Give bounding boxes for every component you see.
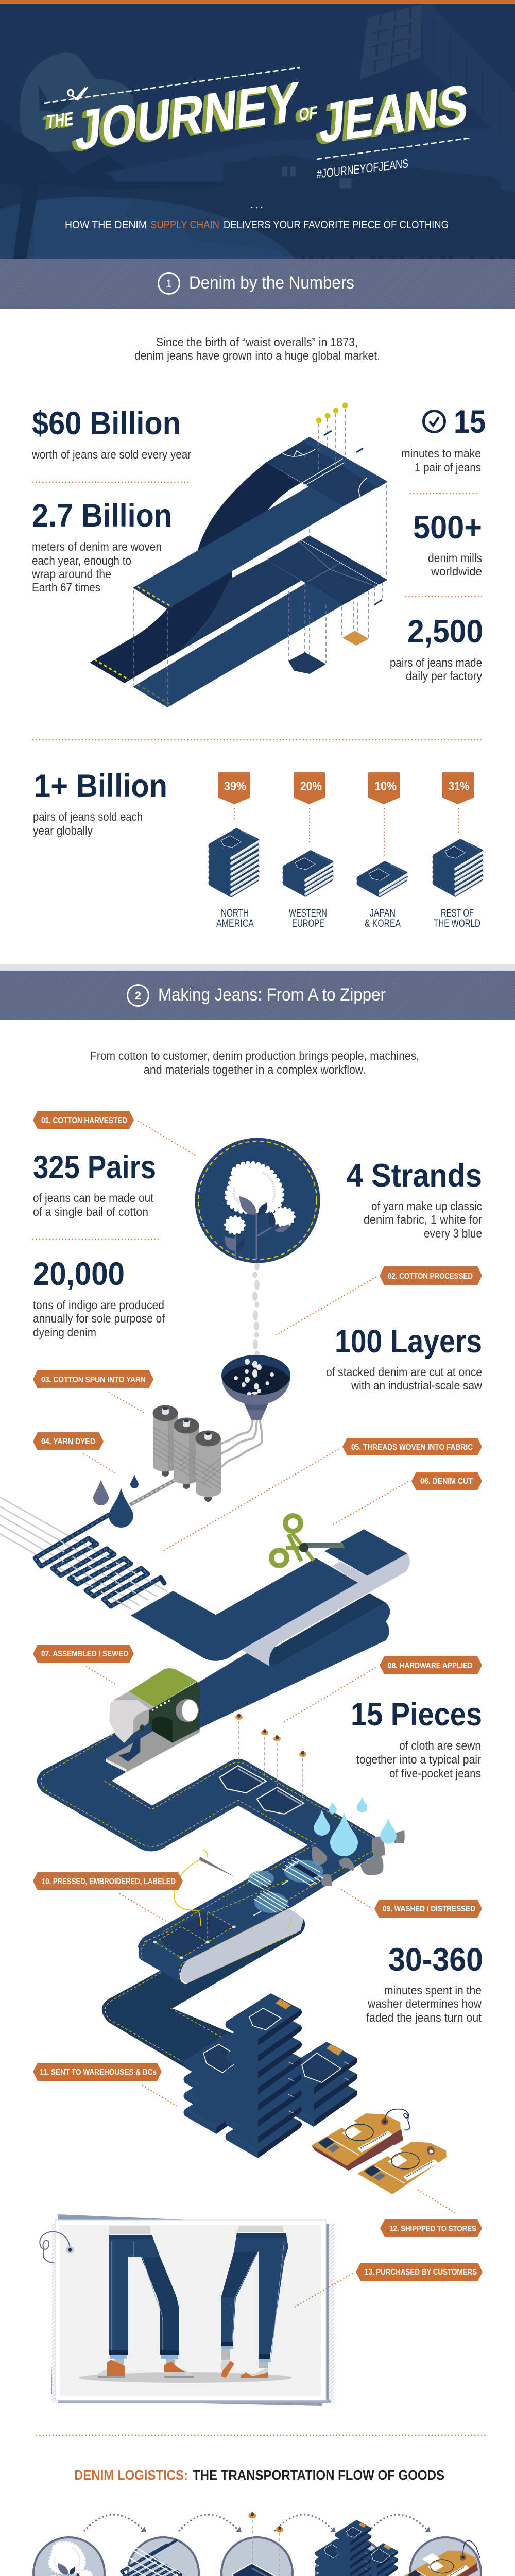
icon: three spools — [152, 1405, 221, 1502]
tag 09 — [374, 1900, 482, 1918]
node: fabric — [122, 2537, 202, 2576]
icon: needle and thread — [174, 1850, 235, 1926]
title: JEANS — [318, 73, 471, 155]
stat: 1+ billion — [33, 768, 167, 837]
hero background silhouettes — [0, 4, 515, 259]
region: western europe: 20% — [300, 779, 322, 793]
stat: 500+: worldwide — [431, 565, 482, 578]
region: rest of the world: REST OF — [441, 907, 474, 919]
chart: regional share of jeans sold — [208, 772, 484, 929]
stat: 325 pairs: of a single bail of cotton — [33, 1205, 148, 1218]
tag 06 — [411, 1472, 482, 1490]
tag 06: 06. DENIM CUT — [420, 1477, 473, 1486]
region: north america: NORTH — [221, 907, 249, 919]
stat: 500+: denim mills — [428, 551, 482, 565]
icon: dye drops — [93, 1475, 139, 1505]
icon: sewing machine — [106, 1668, 200, 1772]
region: north america — [208, 772, 260, 929]
stat: 60 billion: $60 Billion — [32, 405, 181, 442]
stat: 30-360 — [366, 1942, 483, 2024]
stat: 4 strands: 4 Strands — [347, 1158, 482, 1194]
right figure — [221, 2226, 288, 2378]
stat: 1+ billion: year globally — [33, 824, 93, 837]
arrows — [84, 2515, 431, 2532]
stat: 100 layers: of stacked denim are cut at once — [326, 1365, 482, 1379]
section heading 1: Denim by the Numbers — [189, 273, 354, 293]
tag 10: 10. PRESSED, EMBROIDERED, LABELED — [42, 1877, 176, 1886]
tag 02 — [380, 1266, 482, 1285]
tag 05: 05. THREADS WOVEN INTO FABRIC — [351, 1443, 473, 1452]
region: north america: 39% — [224, 779, 246, 793]
tag 03: 03. COTTON SPUN INTO YARN — [41, 1376, 146, 1384]
stat: 60 billion: worth of jeans are sold every year — [31, 448, 191, 461]
illustration: denim fabric path — [37, 1529, 410, 2073]
tag 04 — [33, 1432, 104, 1450]
region: rest of the world: THE WORLD — [434, 918, 480, 929]
icon: stacks of jeans — [183, 1993, 357, 2158]
hero banner — [0, 0, 515, 259]
stat: 15 pieces: of five-pocket jeans — [389, 1767, 481, 1780]
stat: 2,500 — [390, 614, 483, 683]
intro text 1: Since the birth of “waist overalls” in 1873, — [156, 335, 358, 349]
stat: 2,500: pairs of jeans made — [390, 656, 482, 669]
stat: 2.7 billion: each year, enough to — [32, 554, 131, 567]
tag 08: 08. HARDWARE APPLIED — [388, 1662, 473, 1670]
node: retail — [402, 2537, 481, 2576]
region: japan and korea: 10% — [374, 779, 397, 793]
tag 13 — [356, 2263, 483, 2281]
stat: 325 pairs: of jeans can be made out — [33, 1191, 154, 1205]
section heading 2: 2 — [135, 989, 141, 1002]
stat: 20,000 — [33, 1256, 165, 1339]
section heading 2 — [0, 964, 515, 1020]
stat: 60 billion — [31, 405, 191, 461]
stat: 100 layers: 100 Layers — [335, 1324, 482, 1360]
icon: stones and distressing — [248, 1830, 405, 1916]
stat: 2,500: 2,500 — [407, 614, 483, 650]
tag 07: 07. ASSEMBLED / SEWED — [41, 1650, 128, 1658]
tag 11 — [33, 2063, 162, 2081]
tag 08 — [380, 1656, 482, 1674]
stat: 500+: 500+ — [413, 510, 482, 546]
region: rest of the world: 31% — [449, 779, 469, 793]
subtitle: DELIVERS YOUR FAVORITE PIECE OF CLOTHING — [224, 219, 449, 231]
title: JOURNEY — [74, 70, 301, 162]
stat: 1+ billion: pairs of jeans sold each — [33, 810, 143, 823]
node: manufacturing — [221, 2512, 293, 2576]
icon: funnel — [221, 1355, 290, 1420]
cotton badge — [195, 1138, 320, 1263]
stat: 500+ — [413, 510, 482, 578]
logistics heading — [74, 2467, 444, 2483]
stat: 4 strands: of yarn make up classic — [371, 1199, 482, 1213]
title — [46, 70, 471, 162]
region: japan and korea: & KOREA — [365, 918, 401, 929]
intro text 2: From cotton to customer, denim production brings people, machines, — [90, 1049, 419, 1062]
stat: 30-360: 30-360 — [388, 1942, 483, 1978]
region: western europe: WESTERN — [289, 907, 327, 919]
icon: large dye drop — [109, 1488, 133, 1528]
tag 04: 04. YARN DYED — [41, 1437, 95, 1446]
icon: falling cotton fibers — [252, 1262, 260, 1360]
dots — [252, 207, 263, 208]
subtitle: HOW THE DENIM — [65, 219, 147, 231]
stat: 100 layers — [326, 1324, 482, 1392]
stat: 1+ billion: 1+ Billion — [34, 768, 167, 804]
title: OF — [299, 103, 318, 125]
upper stitched line — [44, 67, 300, 103]
logistics flow — [33, 2512, 481, 2576]
intro text 1 — [134, 335, 380, 362]
tag 05 — [342, 1438, 482, 1455]
region: rest of the world — [433, 772, 484, 929]
tag 07 — [33, 1645, 134, 1663]
subtitle: SUPPLY CHAIN — [150, 219, 219, 231]
tag 13: 13. PURCHASED BY CUSTOMERS — [365, 2268, 477, 2277]
photo card: customers wearing jeans — [40, 2214, 334, 2406]
stat: 100 layers: with an industrial-scale saw — [351, 1379, 482, 1392]
logistics heading: THE TRANSPORTATION FLOW OF GOODS — [193, 2467, 444, 2483]
lower stitched line — [317, 138, 470, 159]
tag 12 — [380, 2219, 482, 2237]
tag 02: 02. COTTON PROCESSED — [388, 1272, 473, 1281]
node: cotton — [33, 2537, 105, 2576]
intro text 1: denim jeans have grown into a huge global market. — [134, 349, 380, 362]
string and hole — [40, 2232, 74, 2263]
stat: 30-360: washer determines how — [367, 1997, 482, 2010]
stat: 20,000: annually for sole purpose of — [33, 1312, 165, 1325]
subtitle — [65, 219, 449, 231]
stat: 2.7 billion: Earth 67 times — [32, 581, 100, 594]
title: THE — [46, 108, 74, 132]
stat: 2.7 billion: wrap around the — [31, 567, 111, 581]
node: storage — [315, 2520, 398, 2576]
tag 12: 12. SHIPPPED TO STORES — [389, 2225, 476, 2233]
stat: 4 strands — [347, 1158, 482, 1240]
region: western europe: EUROPE — [292, 918, 324, 929]
stat: 15 minutes: 1 pair of jeans — [415, 461, 481, 474]
stat: 4 strands: denim fabric, 1 white for — [364, 1213, 482, 1226]
tag 10 — [33, 1872, 183, 1890]
icon: rivets and pockets — [219, 1714, 306, 1814]
left figure — [98, 2226, 194, 2378]
illustration: two pairs of jeans — [90, 403, 388, 707]
stat: 15 pieces: together into a typical pair — [356, 1753, 481, 1766]
tag 03 — [33, 1370, 153, 1388]
stat: 325 pairs — [33, 1149, 156, 1218]
intro text 2 — [90, 1049, 419, 1076]
stat: 20,000: 20,000 — [33, 1256, 125, 1292]
stat: 15 minutes: minutes to make — [401, 447, 481, 460]
pocket piece — [288, 652, 326, 674]
icon: price tags — [312, 2109, 447, 2194]
hashtag: #JOURNEYOFJEANS — [317, 157, 408, 181]
icon: water drops — [314, 1797, 397, 1856]
region: japan and korea: JAPAN — [370, 907, 396, 919]
stat: 30-360: faded the jeans turn out — [366, 2011, 482, 2024]
region: north america: AMERICA — [216, 918, 254, 929]
intro text 2: and materials together in a complex workflow. — [144, 1063, 366, 1076]
tag 11: 11. SENT TO WAREHOUSES & DCs — [40, 2068, 157, 2077]
stat: 4 strands: every 3 blue — [424, 1227, 482, 1240]
icon: scissors — [271, 1516, 345, 1566]
logistics heading: DENIM LOGISTICS: — [74, 2467, 188, 2483]
section heading 2: Making Jeans: From A to Zipper — [158, 985, 386, 1005]
top orange bar — [0, 0, 515, 4]
roll — [180, 1908, 305, 1984]
icon: scissors — [68, 87, 88, 100]
tag 01 — [33, 1111, 134, 1129]
fabric lower path — [37, 1621, 389, 2073]
region: western europe — [282, 772, 334, 929]
stat: 2.7 billion — [31, 498, 172, 594]
stat: 15 minutes: 15 — [454, 404, 486, 440]
tag 09: 09. WASHED / DISTRESSED — [383, 1905, 475, 1913]
stat: 20,000: dyeing denim — [33, 1326, 96, 1339]
fabric upper folds — [131, 1529, 410, 1728]
region: japan and korea — [356, 772, 408, 929]
stat: 15 pieces: 15 Pieces — [351, 1697, 482, 1733]
stat: 30-360: minutes spent in the — [384, 1984, 482, 1997]
stat: 15 pieces: of cloth are sewn — [399, 1739, 481, 1752]
yellow pins — [316, 403, 348, 423]
dashed guide lines — [134, 409, 387, 706]
tag 01: 01. COTTON HARVESTED — [41, 1116, 127, 1125]
stat: 15 pieces — [351, 1697, 482, 1780]
icon: yarn threads — [220, 1420, 262, 1467]
stat: 15 minutes — [401, 404, 486, 474]
tan patch — [342, 631, 369, 646]
section heading 1: 1 — [166, 277, 172, 290]
stat: 2.7 billion: meters of denim are woven — [32, 540, 162, 553]
section heading 1 — [0, 259, 515, 309]
stat: 2.7 billion: 2.7 Billion — [32, 498, 172, 534]
woven threads — [0, 1497, 167, 1609]
third-arm seam — [158, 1912, 233, 1958]
icon: twisted yarn — [130, 1480, 176, 1505]
stat: 20,000: tons of indigo are produced — [33, 1298, 164, 1312]
stat: 325 pairs: 325 Pairs — [33, 1149, 156, 1185]
stat: 2,500: daily per factory — [406, 669, 482, 683]
